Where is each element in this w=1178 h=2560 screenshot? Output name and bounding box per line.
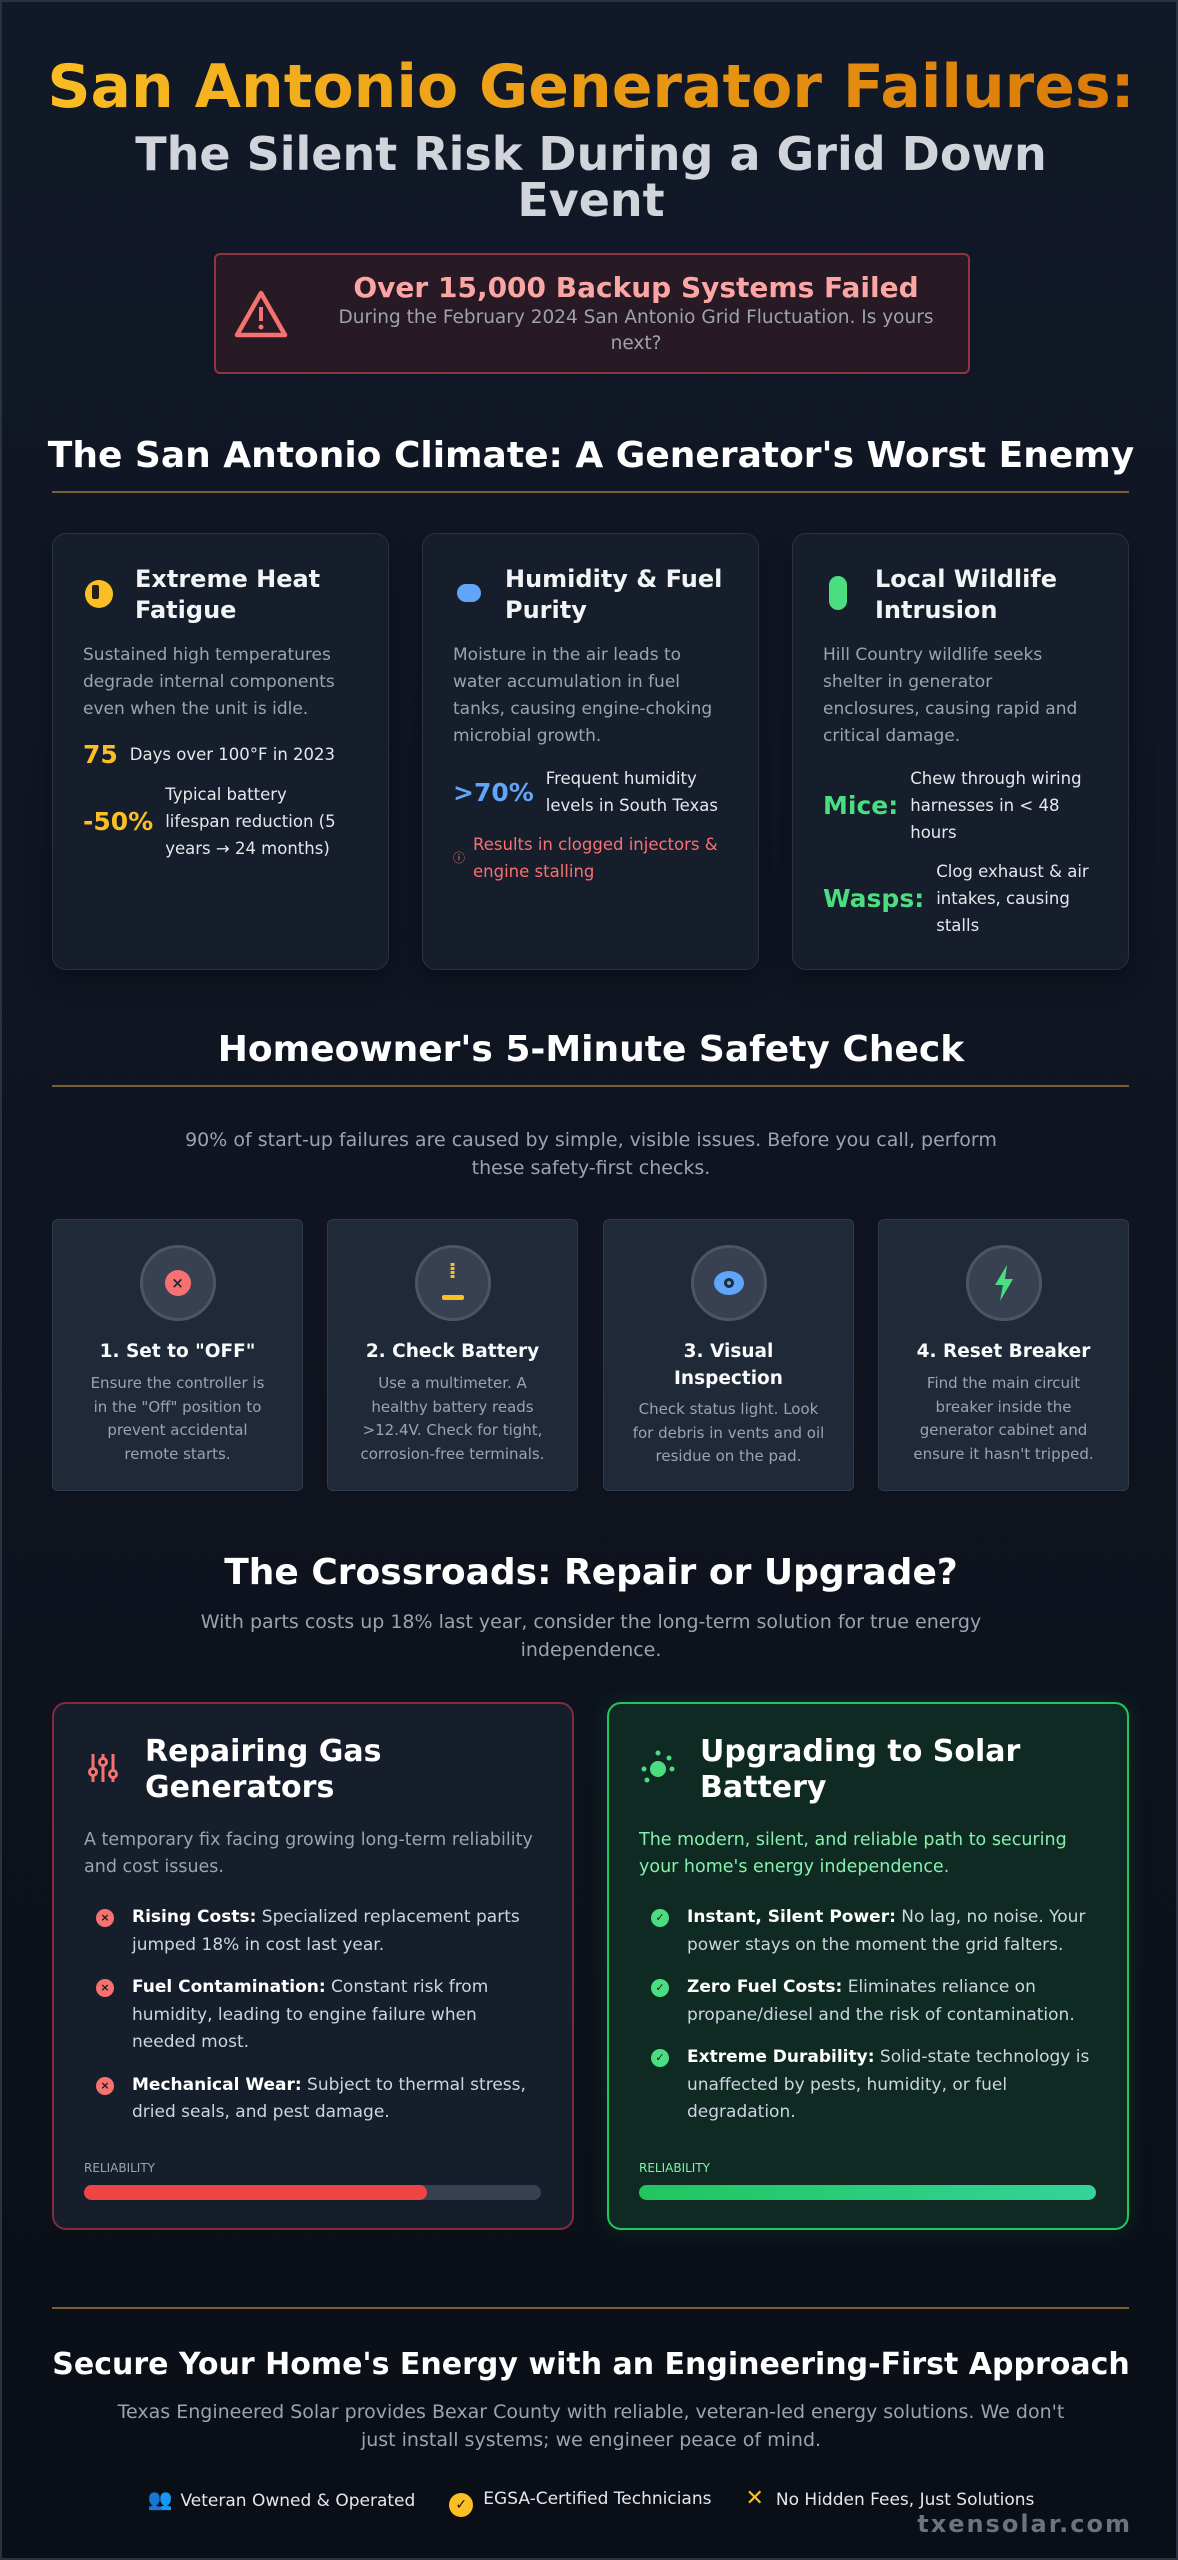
stat: mice bbox=[823, 769, 1082, 842]
panel: heat bbox=[52, 533, 389, 970]
title bbox=[700, 1734, 1020, 1805]
stat: wasps: Wasps: bbox=[823, 884, 924, 913]
icon: cloud bbox=[457, 584, 481, 602]
icon: battery: ⁞ bbox=[448, 1259, 457, 1284]
badges bbox=[148, 2486, 1034, 2517]
list: pros: Extreme Durability: Solid-state technology is unaffected by pests, humidity, or fuel degradation. bbox=[687, 2047, 1089, 2122]
stat: wasps: Clog exhaust & air intakes, causing stalls bbox=[936, 862, 1089, 935]
step 3: Inspection bbox=[674, 1368, 783, 1389]
step 3: Check status light. Look for debris in vents and oil residue on the pad. bbox=[633, 1400, 824, 1465]
icon: bug bbox=[829, 576, 847, 610]
list: pros bbox=[651, 1907, 1089, 2122]
card title: Purity bbox=[505, 596, 587, 624]
reliability bar: RELIABILITY bbox=[84, 2161, 155, 2175]
stat: >70%: >70% bbox=[453, 778, 534, 806]
reliability bar bbox=[84, 2161, 541, 2200]
subtitle bbox=[135, 127, 1047, 227]
panel: wildlife bbox=[792, 533, 1129, 970]
stat: -50%: -50% bbox=[83, 807, 153, 836]
badge: no fees: ✕ No Hidden Fees, Just Solutions bbox=[745, 2486, 1034, 2511]
heading: climate: The San Antonio Climate: A Generator's Worst Enemy bbox=[48, 435, 1134, 476]
step 1 bbox=[52, 1219, 303, 1491]
list: pros: ✓ bbox=[655, 1981, 665, 1994]
badge: certified: EGSA-Certified Technicians bbox=[483, 2489, 711, 2509]
card title: Intrusion bbox=[875, 596, 998, 624]
badge: certified: ✓ bbox=[455, 2497, 467, 2513]
stat: -50% bbox=[83, 785, 336, 858]
list: pros: ✓ bbox=[655, 2051, 665, 2064]
description: A temporary fix facing growing long-term reliability and cost issues. bbox=[84, 1830, 533, 1877]
description: The modern, silent, and reliable path to securing your home's energy independence. bbox=[639, 1830, 1067, 1877]
step 1: Ensure the controller is in the "Off" position to prevent accidental remote starts. bbox=[91, 1374, 264, 1462]
list: cons: × bbox=[100, 2079, 110, 2092]
crossroads intro: With parts costs up 18% last year, consider the long-term solution for true energy independence. bbox=[201, 1611, 981, 1661]
subtitle: Event bbox=[517, 173, 665, 227]
list: cons: Mechanical Wear: Subject to thermal stress, dried seals, and pest damage. bbox=[132, 2074, 526, 2122]
reliability bar bbox=[639, 2161, 1096, 2200]
icon: bolt bbox=[966, 1245, 1042, 1321]
step 3 bbox=[603, 1219, 854, 1491]
step 1: 1. Set to "OFF" bbox=[100, 1341, 255, 1362]
title: Battery bbox=[700, 1770, 826, 1805]
stat: -50%: Typical battery lifespan reduction (5 years → 24 months) bbox=[165, 785, 336, 858]
step 2: Use a multimeter. A healthy battery reads >12.4V. Check for tight, corrosion-free terminals. bbox=[360, 1374, 544, 1462]
panel: solar bbox=[607, 1702, 1129, 2230]
list: pros: ✓ bbox=[655, 1911, 665, 1924]
body: Sustained high temperatures degrade internal components even when the unit is idle. bbox=[83, 645, 335, 719]
list: pros: Instant, Silent Power: No lag, no noise. Your power stays on the moment the grid falters. bbox=[687, 1907, 1085, 1954]
stat: >70%: Frequent humidity levels in South Texas bbox=[546, 769, 718, 815]
intro text: 90% of start-up failures are caused by simple, visible issues. Before you call, perform these safety-first checks. bbox=[185, 1129, 997, 1179]
stat: 75: 75 bbox=[83, 740, 118, 769]
card title: Humidity & Fuel bbox=[505, 565, 722, 593]
warning note: ⓘ bbox=[453, 851, 465, 865]
step 2: 2. Check Battery bbox=[366, 1341, 539, 1362]
title bbox=[145, 1734, 382, 1805]
icon: sun bbox=[642, 1750, 674, 1782]
stat: 75: Days over 100°F in 2023 bbox=[130, 745, 335, 764]
step 4: Find the main circuit breaker inside the generator cabinet and ensure it hasn't tripped. bbox=[913, 1374, 1094, 1462]
subtitle: The Silent Risk During a Grid Down bbox=[135, 127, 1047, 181]
card title bbox=[135, 565, 320, 624]
card title bbox=[505, 565, 722, 624]
body: Moisture in the air leads to water accumulation in fuel tanks, causing engine-choking microbial growth. bbox=[453, 645, 712, 746]
icon: warning triangle bbox=[234, 290, 288, 338]
icon: x bbox=[140, 1245, 216, 1321]
card title: Local Wildlife bbox=[875, 565, 1057, 593]
step 2 bbox=[327, 1219, 578, 1491]
step 3: 3. Visual bbox=[684, 1341, 773, 1362]
badge: veteran: 👥 Veteran Owned & Operated bbox=[148, 2487, 415, 2511]
list: cons: × bbox=[100, 1911, 110, 1924]
alert text: During the February 2024 San Antonio Grid Fluctuation. Is yours next? bbox=[339, 307, 933, 354]
list: cons: × bbox=[100, 1981, 110, 1994]
title: San Antonio Generator Failures: bbox=[47, 52, 1135, 122]
list: cons bbox=[96, 1907, 526, 2122]
title: Upgrading to Solar bbox=[700, 1734, 1020, 1769]
icon: eye bbox=[690, 1245, 766, 1321]
icon: battery bbox=[414, 1245, 490, 1321]
brand: txensolar.com bbox=[917, 2510, 1132, 2538]
heading: crossroads: The Crossroads: Repair or Upgrade? bbox=[224, 1552, 958, 1593]
heading: safety check: Homeowner's 5-Minute Safety Check bbox=[218, 1029, 964, 1070]
card title bbox=[875, 565, 1057, 624]
icon: sun bbox=[85, 580, 113, 608]
card title: Fatigue bbox=[135, 596, 236, 624]
title: Generators bbox=[145, 1770, 334, 1805]
panel: repair bbox=[52, 1702, 574, 2230]
icon: sliders bbox=[88, 1754, 118, 1782]
body: Hill Country wildlife seeks shelter in generator enclosures, causing rapid and critical damage. bbox=[823, 645, 1077, 746]
stat: 75 bbox=[83, 740, 335, 769]
alert callout bbox=[214, 253, 970, 374]
footer heading: Secure Your Home's Energy with an Engineering-First Approach bbox=[52, 2347, 1130, 2382]
stat: wasps bbox=[823, 862, 1089, 935]
alert text: Over 15,000 Backup Systems Failed bbox=[353, 271, 919, 304]
list: cons: Rising Costs: Specialized replacement parts jumped 18% in cost last year. bbox=[132, 1907, 520, 1954]
stat: >70% bbox=[453, 769, 718, 815]
list: cons: Fuel Contamination: Constant risk from humidity, leading to engine failure when needed most. bbox=[132, 1977, 488, 2052]
step 4 bbox=[878, 1219, 1129, 1491]
badge: certified bbox=[449, 2489, 711, 2517]
footer text: Texas Engineered Solar provides Bexar County with reliable, veteran-led energy solutions. We don't just install systems; we engineer peace of mind. bbox=[118, 2401, 1064, 2451]
alert text bbox=[339, 271, 933, 354]
panel: humidity bbox=[422, 533, 759, 970]
stat: mice: Mice: bbox=[823, 791, 898, 820]
warning note: Results in clogged injectors & engine stalling bbox=[473, 835, 718, 881]
list: pros: Zero Fuel Costs: Eliminates reliance on propane/diesel and the risk of contamination. bbox=[687, 1977, 1075, 2024]
stat: mice: Chew through wiring harnesses in < 48 hours bbox=[910, 769, 1082, 842]
step 4: 4. Reset Breaker bbox=[917, 1341, 1090, 1362]
reliability bar: RELIABILITY bbox=[639, 2161, 710, 2175]
icon: x: × bbox=[171, 1274, 184, 1292]
card title: Extreme Heat bbox=[135, 565, 320, 593]
title: Repairing Gas bbox=[145, 1734, 382, 1769]
